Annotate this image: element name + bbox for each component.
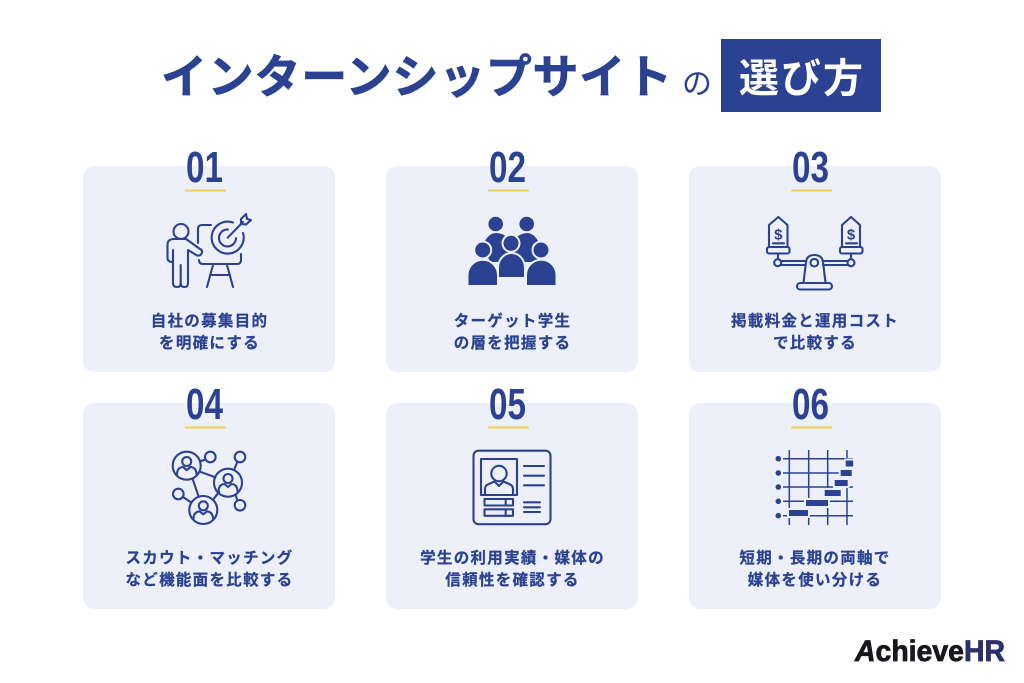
label (151, 312, 268, 352)
icon: profile card (474, 451, 550, 524)
title: 選び方 (739, 57, 863, 101)
label: ターゲット学生 (454, 311, 571, 330)
icon: balance scale with price tags: $ (847, 226, 856, 244)
title: の (682, 68, 712, 101)
panel: 01: 01 (186, 143, 223, 192)
panel: 03: 03 (792, 143, 829, 192)
panel: 04: 04 (186, 380, 223, 429)
logo: AchieveHR (854, 635, 1005, 668)
icon: gantt chart (776, 450, 854, 525)
label (125, 548, 294, 589)
panel: 05 (386, 380, 638, 609)
panel: 03 (689, 143, 941, 372)
label: 掲載料金と運用コスト (731, 311, 899, 330)
icon: network of people (173, 452, 245, 524)
title: インターンシップサイト (161, 51, 672, 103)
panel: 01 (83, 143, 335, 372)
label: 媒体を使い分ける (748, 571, 882, 589)
label: で比較する (773, 334, 857, 352)
panel: 05: 05 (489, 380, 526, 429)
label (731, 311, 899, 352)
label: など機能面を比較する (125, 570, 294, 589)
label (739, 549, 891, 589)
label: 短期・長期の両軸で (739, 549, 891, 567)
panel: 02: 02 (489, 143, 526, 192)
icon: balance scale with price tags: $ (774, 226, 783, 244)
panel: 06 (689, 380, 941, 609)
label: の層を把握する (454, 333, 571, 352)
label: 自社の募集目的 (151, 312, 268, 330)
panel: 02 (386, 143, 638, 372)
label: 学生の利用実績・媒体の (420, 548, 605, 567)
panel: 06: 06 (792, 380, 829, 429)
label: 信頼性を確認する (445, 570, 580, 589)
panel: 04 (83, 380, 335, 609)
label: を明確にする (159, 333, 260, 352)
icon: balance scale with price tags (767, 217, 862, 290)
title (161, 39, 881, 112)
label: スカウト・マッチング (125, 548, 294, 567)
icon: group of people (468, 217, 556, 286)
label (454, 311, 571, 352)
icon: presenter with target (168, 214, 251, 287)
label (420, 548, 605, 589)
